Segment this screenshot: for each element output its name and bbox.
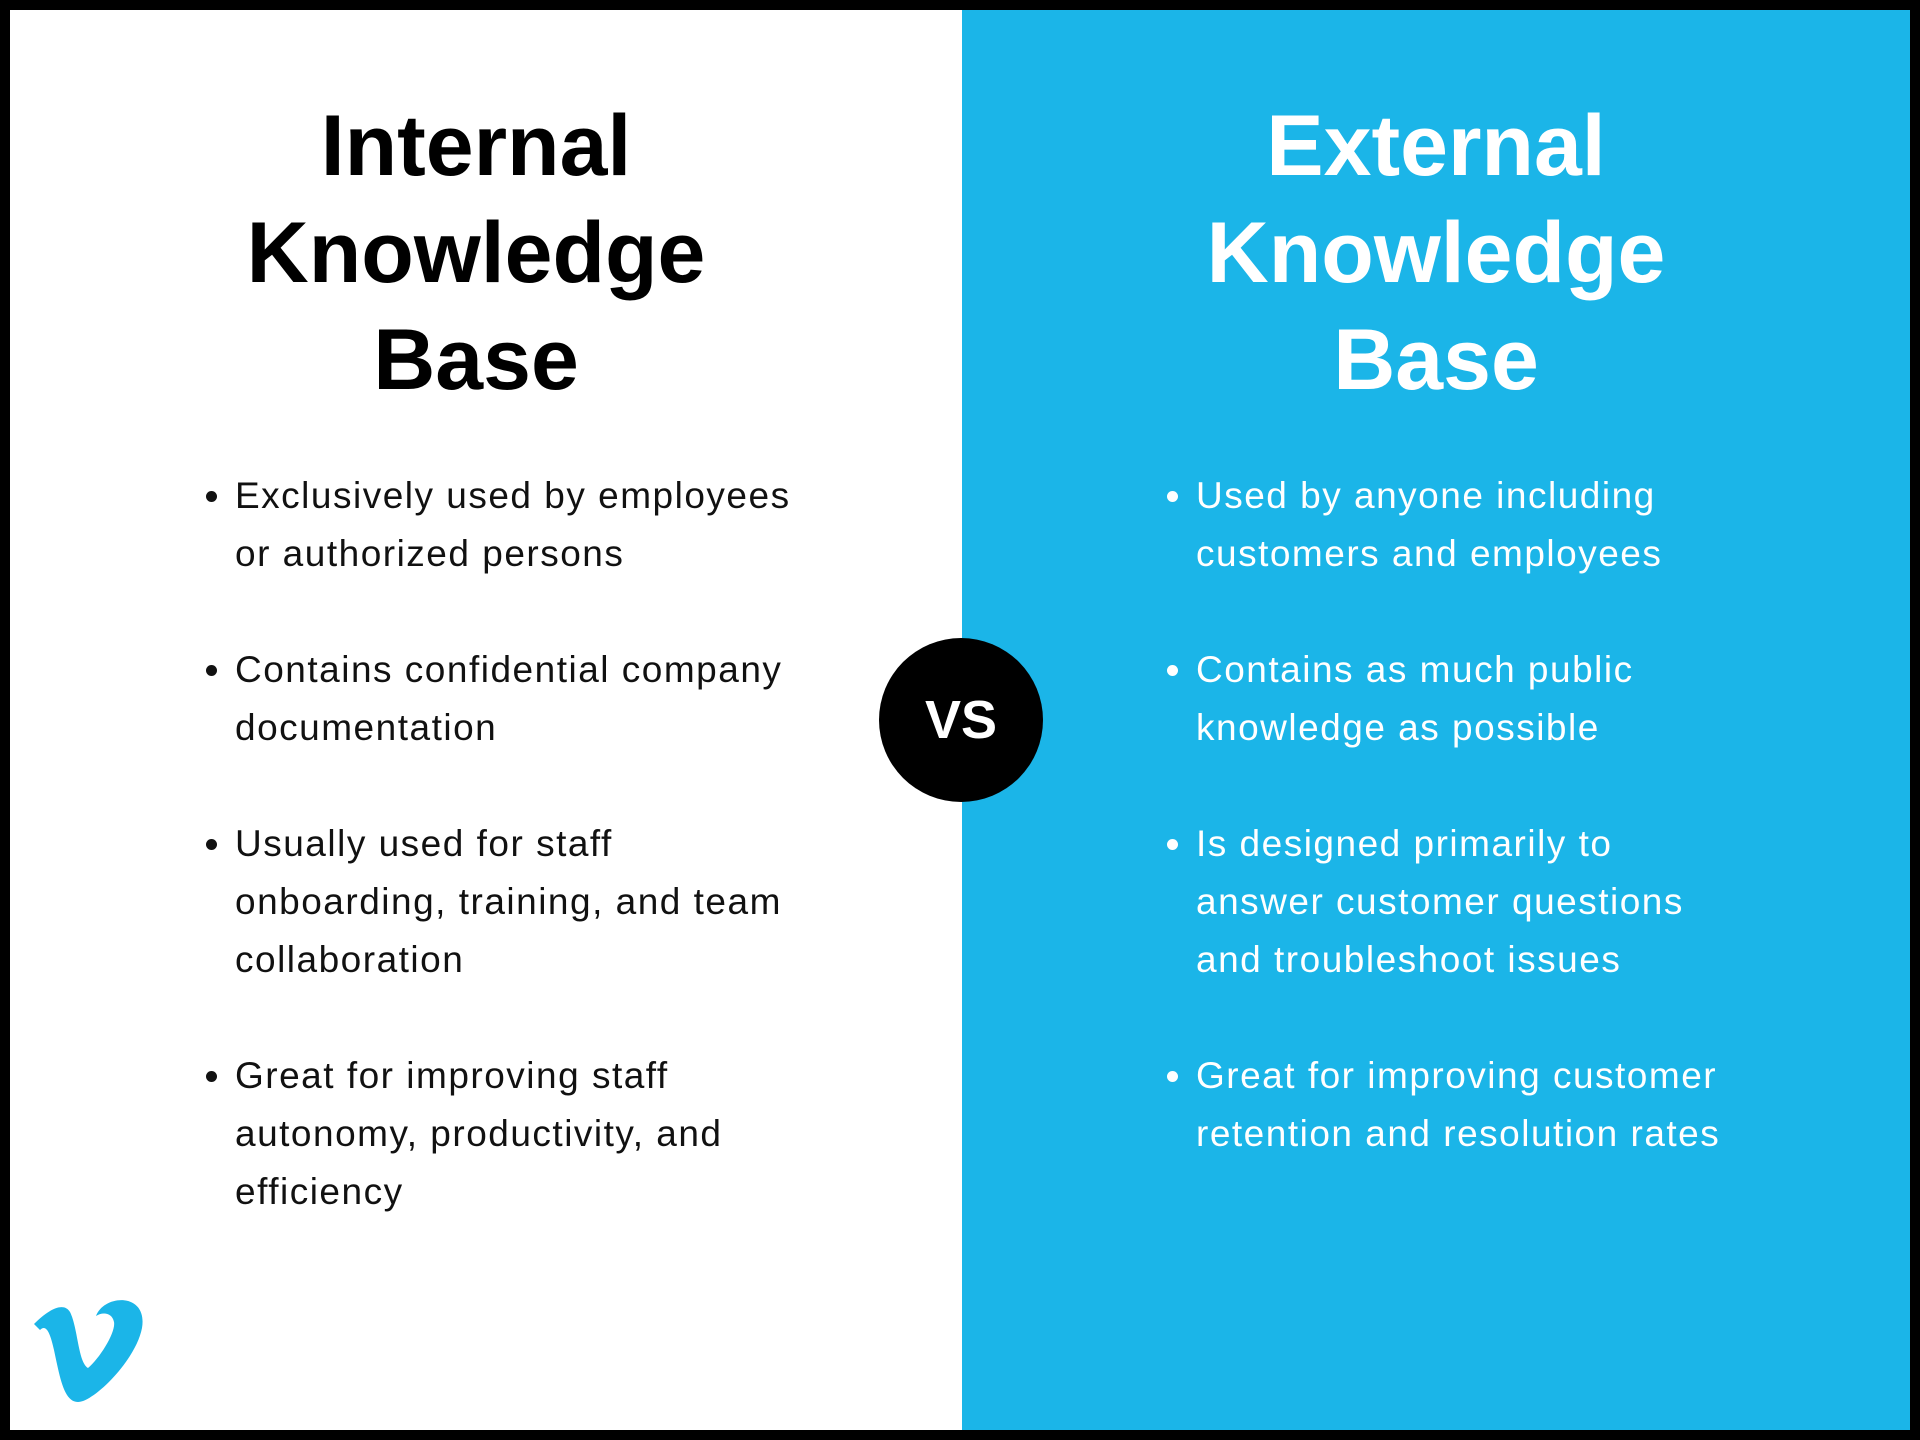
title: internal: Knowledge: [247, 205, 705, 301]
bullet list: internal: collaboration: [235, 939, 464, 980]
bullet list: internal: Exclusively used by employees: [235, 475, 791, 516]
bullet list: internal: Great for improving staff: [235, 1055, 669, 1096]
title: external: Knowledge: [1207, 205, 1665, 301]
title: external: External: [1266, 98, 1606, 194]
bullet list: external: Great for improving customer: [1196, 1055, 1717, 1096]
bullet list: external: Used by anyone including: [1196, 475, 1656, 516]
title: external: Base: [1333, 312, 1539, 408]
bullet list: external: and troubleshoot issues: [1196, 939, 1621, 980]
panel: internal: [10, 10, 962, 1430]
title: internal: Internal: [321, 98, 631, 194]
bullet list: internal: documentation: [235, 707, 497, 748]
bullet list: external: customers and employees: [1196, 533, 1662, 574]
title: internal: Base: [373, 312, 579, 408]
bullet list: internal: [206, 475, 791, 1212]
bullet list: external: knowledge as possible: [1196, 707, 1600, 748]
bullet list: external: [1167, 475, 1720, 1154]
vs circle: [879, 638, 1043, 802]
bullet list: internal: onboarding, training, and team: [235, 881, 782, 922]
bullet list: external: answer customer questions: [1196, 881, 1684, 922]
bullet list: external: Contains as much public: [1196, 649, 1634, 690]
bullet list: internal: efficiency: [235, 1171, 404, 1212]
title: internal: [247, 98, 705, 408]
bullet list: internal: Usually used for staff: [235, 823, 613, 864]
panel: external: [962, 10, 1910, 1430]
bullet list: internal: autonomy, productivity, and: [235, 1113, 722, 1154]
bullet list: external: retention and resolution rates: [1196, 1113, 1720, 1154]
bullet list: external: Is designed primarily to: [1196, 823, 1612, 864]
icon: vimeo logo: [34, 1300, 143, 1402]
vs circle: VS: [925, 690, 997, 750]
bullet list: internal: or authorized persons: [235, 533, 624, 574]
bullet list: internal: Contains confidential company: [235, 649, 782, 690]
title: external: [1207, 98, 1665, 408]
